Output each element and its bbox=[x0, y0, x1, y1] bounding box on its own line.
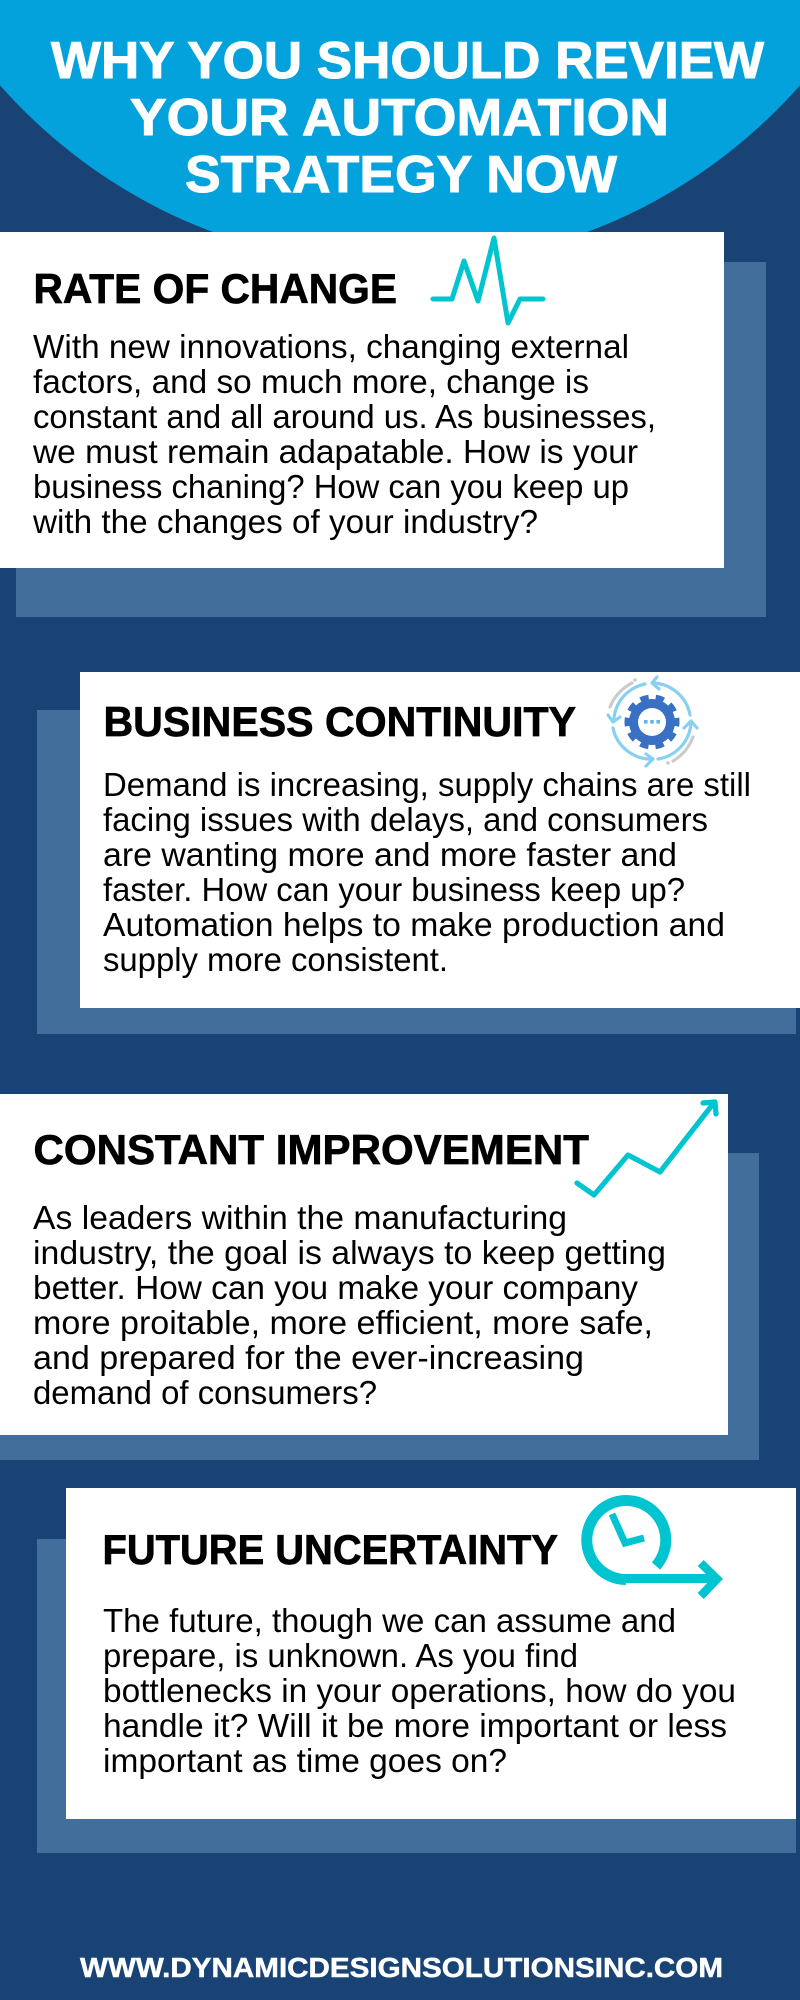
icon: rising trend arrow bbox=[577, 1102, 716, 1195]
text: future uncertainty body: prepare, is unknown. As you find bbox=[103, 1637, 578, 1674]
text: rate of change body: constant and all around us. As businesses, bbox=[33, 398, 656, 435]
heading: constant improvement: CONSTANT IMPROVEMENT bbox=[34, 1126, 589, 1173]
title: YOUR AUTOMATION bbox=[130, 89, 669, 147]
text: constant improvement body bbox=[33, 1199, 666, 1411]
text: business continuity body: faster. How can your business keep up? bbox=[103, 871, 685, 908]
icon: clock with arrow bbox=[587, 1501, 717, 1596]
text: future uncertainty body: bottlenecks in your operations, how do you bbox=[103, 1672, 736, 1709]
text: business continuity body bbox=[103, 766, 751, 978]
title: STRATEGY NOW bbox=[185, 146, 618, 204]
heading: business continuity: BUSINESS CONTINUITY bbox=[104, 698, 576, 745]
footer: website url: WWW.DYNAMICDESIGNSOLUTIONSINC.COM bbox=[80, 1952, 723, 1983]
text: business continuity body: Automation helps to make production and bbox=[103, 906, 725, 943]
text: constant improvement body: As leaders within the manufacturing bbox=[33, 1199, 567, 1236]
icon: pulse line bbox=[433, 238, 543, 323]
panel: constant improvement bbox=[0, 1094, 759, 1460]
text: future uncertainty body bbox=[103, 1602, 736, 1779]
text: constant improvement body: and prepared for the ever-increasing bbox=[33, 1339, 584, 1376]
title: WHY YOU SHOULD REVIEW bbox=[51, 32, 765, 90]
text: future uncertainty body: important as time goes on? bbox=[103, 1742, 507, 1779]
text: rate of change body: with the changes of your industry? bbox=[32, 503, 538, 540]
text: constant improvement body: industry, the goal is always to keep getting bbox=[33, 1234, 666, 1271]
title bbox=[51, 32, 765, 204]
heading: rate of change: RATE OF CHANGE bbox=[34, 265, 397, 312]
text: rate of change body: we must remain adapatable. How is your bbox=[32, 433, 638, 470]
panel: rate of change bbox=[0, 232, 766, 617]
text: business continuity body: are wanting more and more faster and bbox=[103, 836, 677, 873]
text: business continuity body: supply more consistent. bbox=[103, 941, 448, 978]
text: constant improvement body: demand of consumers? bbox=[33, 1374, 377, 1411]
text: constant improvement body: better. How can you make your company bbox=[33, 1269, 639, 1306]
text: constant improvement body: more proitable, more efficient, more safe, bbox=[33, 1304, 653, 1341]
text: rate of change body: business chaning? How can you keep up bbox=[33, 468, 629, 505]
panel: business continuity bbox=[37, 672, 800, 1034]
text: business continuity body: facing issues with delays, and consumers bbox=[103, 801, 708, 838]
panel: future uncertainty bbox=[37, 1488, 796, 1853]
text: rate of change body: With new innovations, changing external bbox=[33, 328, 629, 365]
heading: future uncertainty: FUTURE UNCERTAINTY bbox=[102, 1526, 558, 1573]
text: business continuity body: Demand is increasing, supply chains are still bbox=[103, 766, 751, 803]
text: rate of change body bbox=[32, 328, 656, 540]
text: future uncertainty body: handle it? Will it be more important or less bbox=[103, 1707, 727, 1744]
icon: gear with cycle arrows bbox=[608, 677, 697, 766]
header: blue semicircle bbox=[0, 0, 800, 266]
text: rate of change body: factors, and so much more, change is bbox=[33, 363, 589, 400]
text: future uncertainty body: The future, though we can assume and bbox=[103, 1602, 676, 1639]
